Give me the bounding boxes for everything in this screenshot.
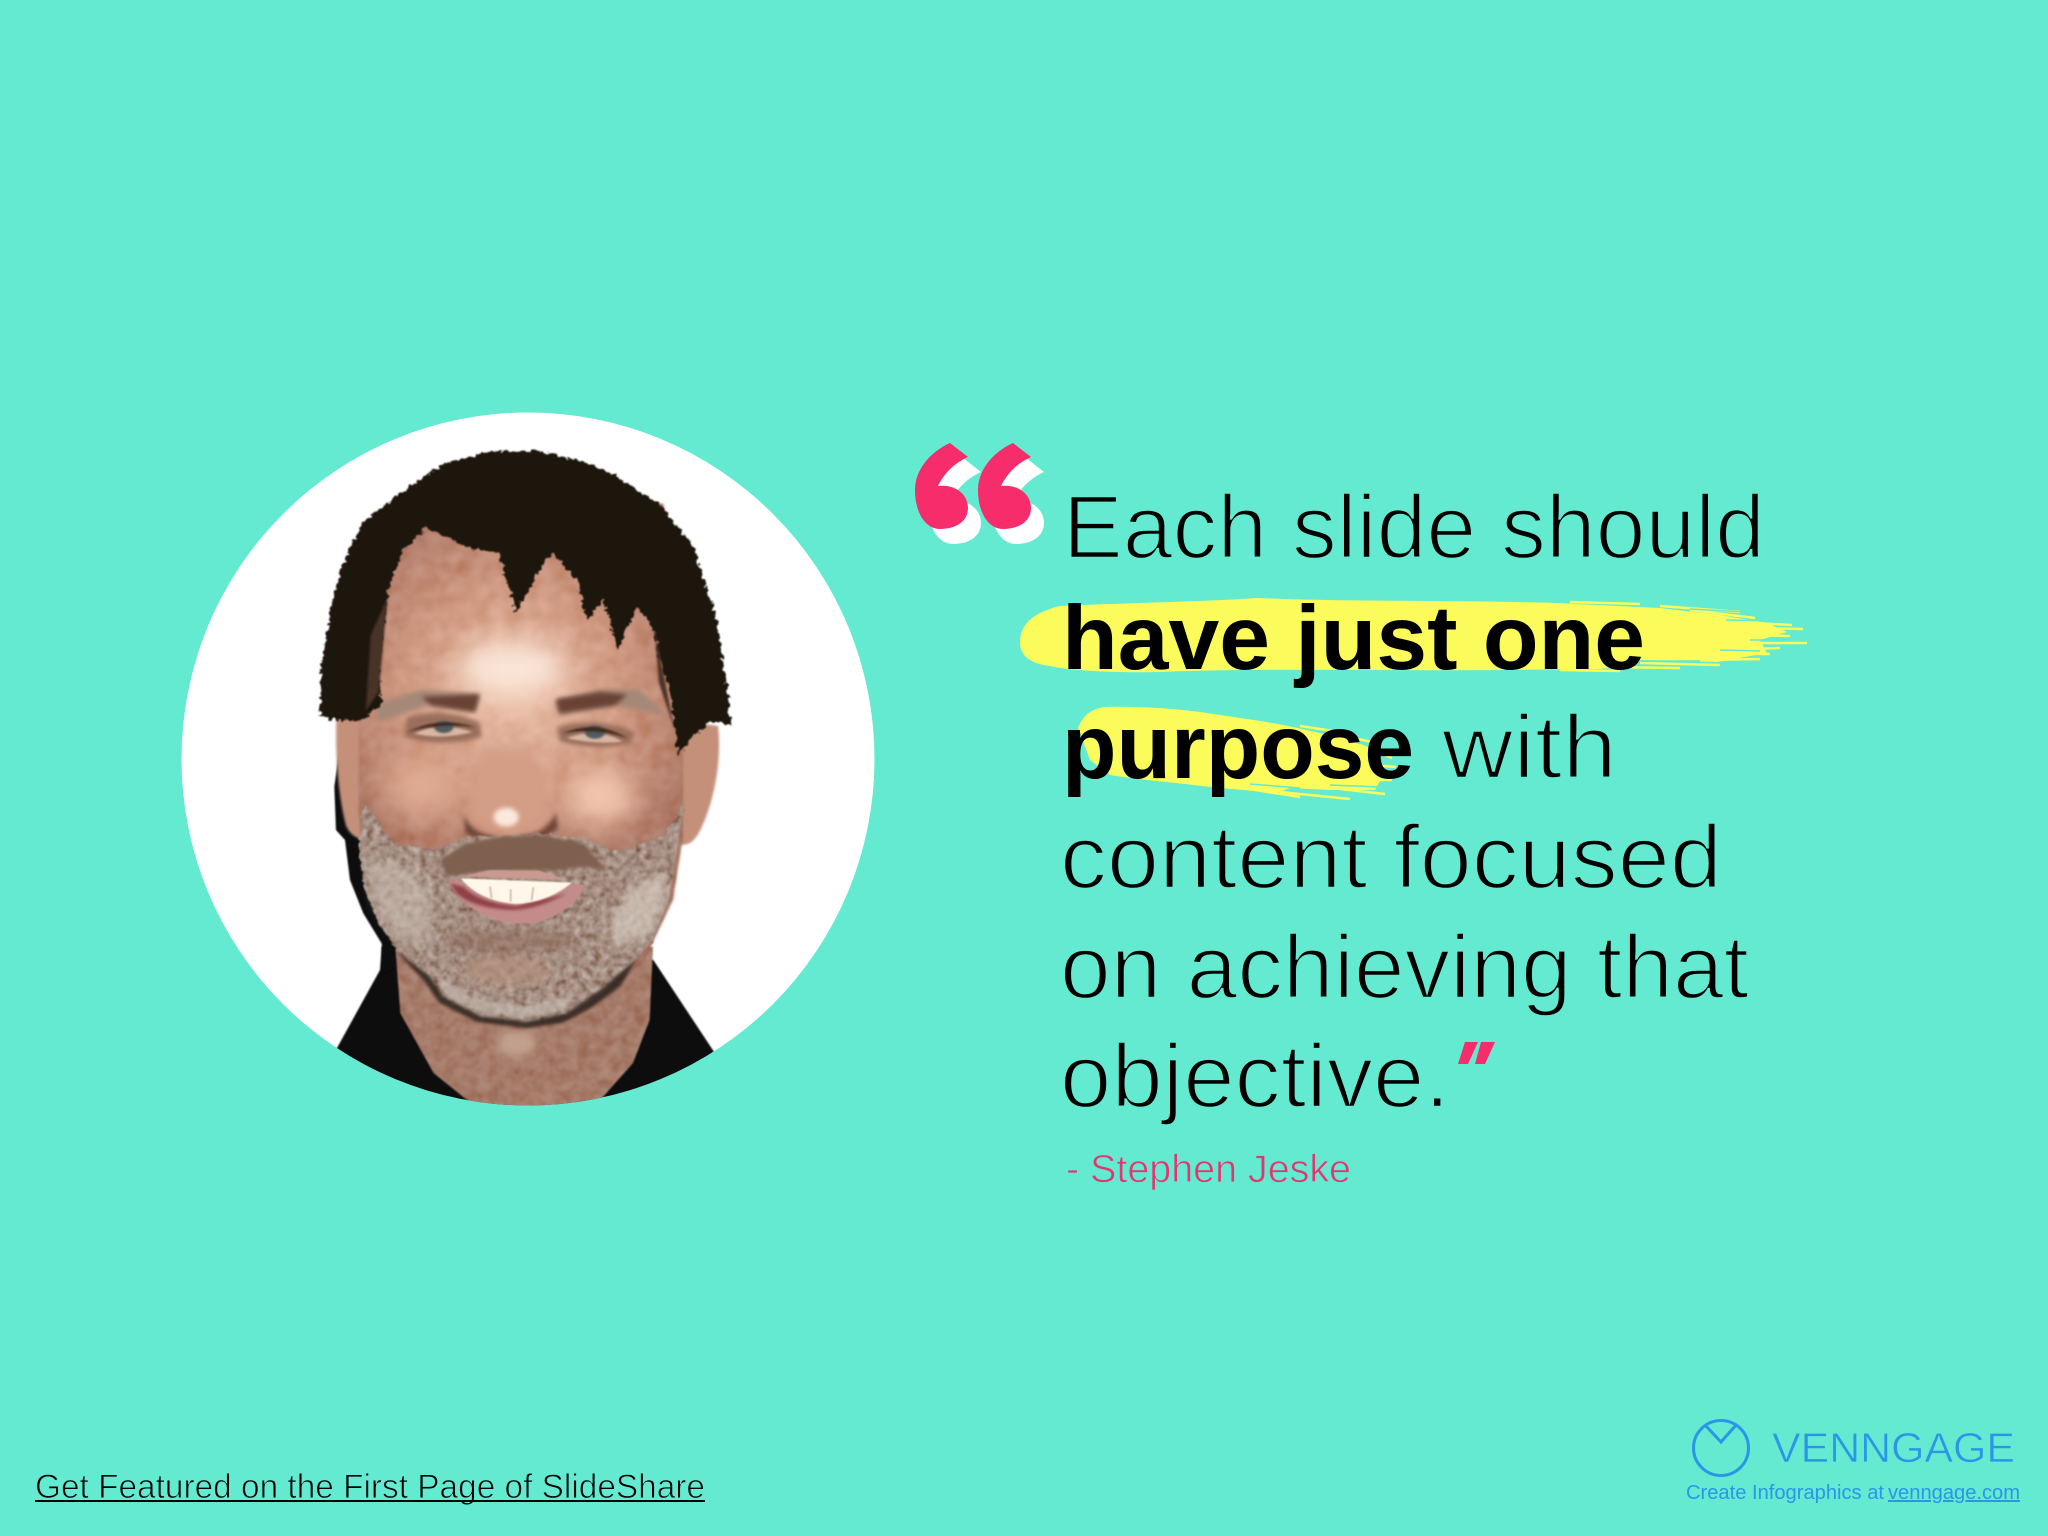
cheek highlights bbox=[567, 768, 635, 824]
brush frayed streaks bbox=[1230, 726, 1396, 799]
beard and mouth bbox=[358, 800, 685, 1028]
forehead highlight bbox=[458, 642, 564, 694]
shirt and neck bbox=[334, 747, 715, 1147]
quote text bbox=[1060, 478, 1765, 1127]
Venngage logo bbox=[1686, 1420, 2020, 1504]
hair bbox=[320, 450, 732, 756]
chin skin patch bbox=[463, 955, 550, 985]
left ear bbox=[334, 718, 362, 840]
brush highlight: purpose bbox=[1078, 707, 1396, 799]
portrait photo: Stephen Jeske in white circle bbox=[181, 412, 875, 1147]
brush frayed streaks bbox=[1560, 602, 1807, 671]
tagline: Create Infographics at bbox=[1686, 1482, 1884, 1504]
face bbox=[358, 503, 683, 1022]
hair brown streaks bbox=[366, 598, 674, 730]
left eye and brow bbox=[378, 690, 482, 743]
shadow beside the neck bbox=[333, 757, 398, 957]
line 3 regular: with bbox=[1441, 698, 1617, 798]
line 1: Each slide should bbox=[1063, 478, 1765, 578]
upper lip bbox=[460, 870, 567, 880]
line 5: on achieving that bbox=[1060, 918, 1749, 1018]
nose bbox=[465, 749, 555, 836]
footer link: Get Featured on the First Page of SlideShare bbox=[35, 1468, 705, 1506]
beard grey patches bbox=[367, 857, 433, 947]
opening quotation mark bbox=[915, 443, 1044, 544]
closing quotation mark bbox=[1458, 1042, 1495, 1064]
beard under-lip band bbox=[447, 930, 577, 953]
brush highlight: have just one bbox=[1020, 598, 1807, 672]
lower lip bbox=[448, 880, 585, 923]
neck bbox=[395, 947, 653, 1108]
line 4: content focused bbox=[1060, 808, 1722, 908]
shirt collar bbox=[336, 946, 714, 1106]
line 6: objective. bbox=[1060, 1027, 1450, 1127]
slide canvas bbox=[35, 412, 2020, 1504]
teeth bbox=[461, 878, 572, 904]
wordmark: VENNGAGE bbox=[1772, 1424, 2015, 1471]
right eye and brow bbox=[555, 690, 666, 747]
icon: clock circle bbox=[1694, 1420, 1748, 1476]
attribution: - Stephen Jeske bbox=[1066, 1148, 1351, 1191]
moustache bbox=[440, 835, 607, 877]
mouth bbox=[448, 870, 585, 923]
venngage link: venngage.com bbox=[1888, 1482, 2020, 1504]
line 2 bold: have just one bbox=[1062, 588, 1645, 689]
beard bbox=[358, 800, 685, 1025]
beard underside shadow bbox=[395, 950, 637, 1028]
right ear bbox=[678, 720, 719, 845]
line 3 bold: purpose bbox=[1062, 697, 1414, 798]
